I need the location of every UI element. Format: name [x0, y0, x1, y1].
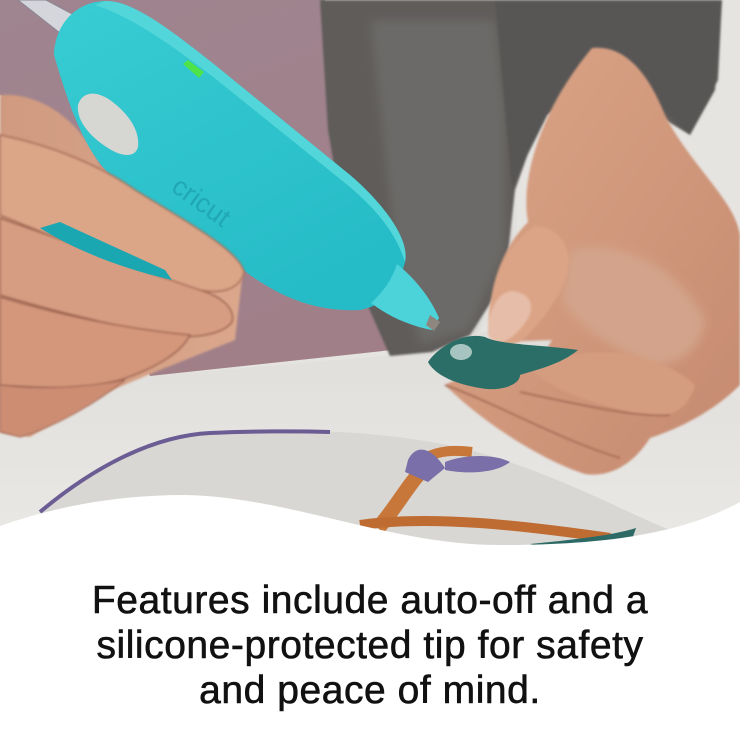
glue gun	[54, 1, 440, 331]
pillow purple trim	[40, 431, 330, 512]
caption text: and peace of mind.	[199, 669, 541, 712]
caption text: Features include auto-off and a	[92, 579, 648, 622]
glue gun lower edge	[40, 222, 172, 280]
green LED	[183, 60, 204, 78]
index finger	[0, 135, 244, 291]
metal tip	[426, 315, 440, 331]
felt flower decoration	[360, 450, 636, 552]
felt leaf with glue drop	[428, 336, 578, 389]
caption text	[92, 579, 648, 712]
table surface	[0, 305, 740, 540]
inner palm	[562, 247, 705, 365]
thumb	[488, 226, 568, 344]
brand mark: cricut	[166, 171, 237, 233]
thumbnail	[488, 291, 531, 342]
middle finger	[530, 352, 695, 416]
hand silhouette	[445, 48, 740, 475]
ring finger	[0, 297, 190, 387]
grey button	[78, 94, 138, 155]
little finger	[0, 380, 125, 437]
left fingers	[0, 135, 244, 437]
right hand	[445, 48, 740, 475]
pillow	[40, 431, 670, 560]
grey cardigan	[320, 0, 722, 356]
top highlight	[95, 1, 406, 262]
left hand back	[0, 95, 243, 437]
nozzle cone	[371, 264, 439, 330]
background wall	[0, 0, 740, 540]
gun body	[54, 1, 406, 310]
glue stick tube	[18, 0, 78, 33]
caption text: silicone-protected tip for safety	[96, 624, 644, 667]
middle finger	[0, 218, 233, 337]
pink shirt	[0, 0, 392, 376]
finger creases	[445, 385, 670, 458]
white wave panel	[0, 495, 740, 740]
